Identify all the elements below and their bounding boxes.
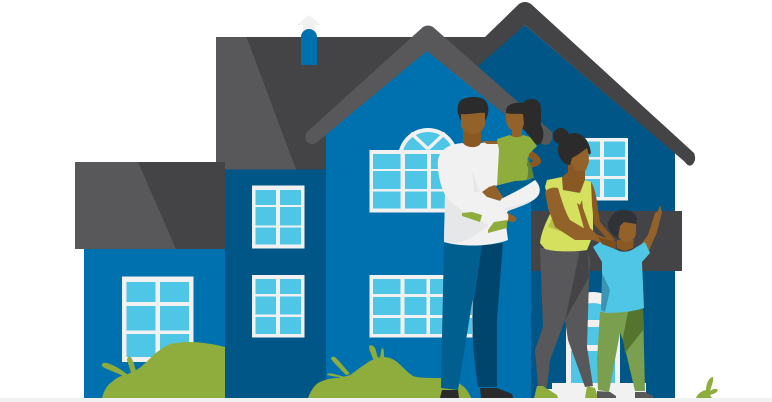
child head xyxy=(506,113,524,139)
woman head and neck xyxy=(553,128,591,193)
man hand behind child xyxy=(482,141,498,144)
man trousers xyxy=(441,243,503,390)
man torso shading xyxy=(444,172,488,243)
boy shoes xyxy=(597,391,653,398)
child arm xyxy=(514,150,541,171)
boy left arm xyxy=(577,200,610,252)
woman right arm xyxy=(591,182,615,242)
middle bush xyxy=(308,345,471,398)
woman top xyxy=(540,177,593,251)
figure: boy xyxy=(577,200,662,398)
child shoes xyxy=(462,212,482,222)
house: front gable xyxy=(305,26,553,398)
boy right arm xyxy=(640,205,662,253)
figure: woman xyxy=(534,128,617,398)
woman top shade xyxy=(548,218,566,233)
child lower leg xyxy=(495,212,517,222)
left bush xyxy=(102,342,225,398)
man torso xyxy=(438,141,508,246)
window: tower upper xyxy=(252,186,304,248)
porch roof xyxy=(531,211,682,271)
woman left arm xyxy=(545,188,617,249)
boy head xyxy=(608,210,637,251)
child thigh xyxy=(482,185,503,201)
window: arched front xyxy=(370,128,486,212)
window: tower lower xyxy=(252,275,304,338)
man neck and head xyxy=(458,97,488,148)
man shoes xyxy=(440,388,513,398)
boy shirt shade xyxy=(601,273,610,312)
figure: man xyxy=(438,97,513,398)
child shirt xyxy=(497,135,537,186)
child ponytail and hair xyxy=(506,99,543,144)
man arm xyxy=(470,180,540,216)
figure: child xyxy=(462,99,543,233)
chimney xyxy=(297,15,321,65)
child leg blue xyxy=(495,180,535,198)
window: left wing xyxy=(122,276,194,362)
right sprig xyxy=(696,377,718,398)
house: right wing wall xyxy=(470,25,675,398)
ground xyxy=(0,398,772,402)
upper roof xyxy=(216,2,695,170)
woman shoes xyxy=(534,386,598,398)
porch door xyxy=(566,292,620,383)
house: left wing xyxy=(75,162,225,398)
window: lower front xyxy=(370,275,472,338)
woman hand on boy xyxy=(598,237,617,249)
boy shirt xyxy=(593,242,650,313)
window: right wing xyxy=(578,138,628,200)
woman trousers xyxy=(535,248,593,387)
tower xyxy=(225,170,326,398)
man forearm xyxy=(470,198,508,224)
porch steps xyxy=(545,383,646,398)
boy trousers xyxy=(597,308,645,392)
